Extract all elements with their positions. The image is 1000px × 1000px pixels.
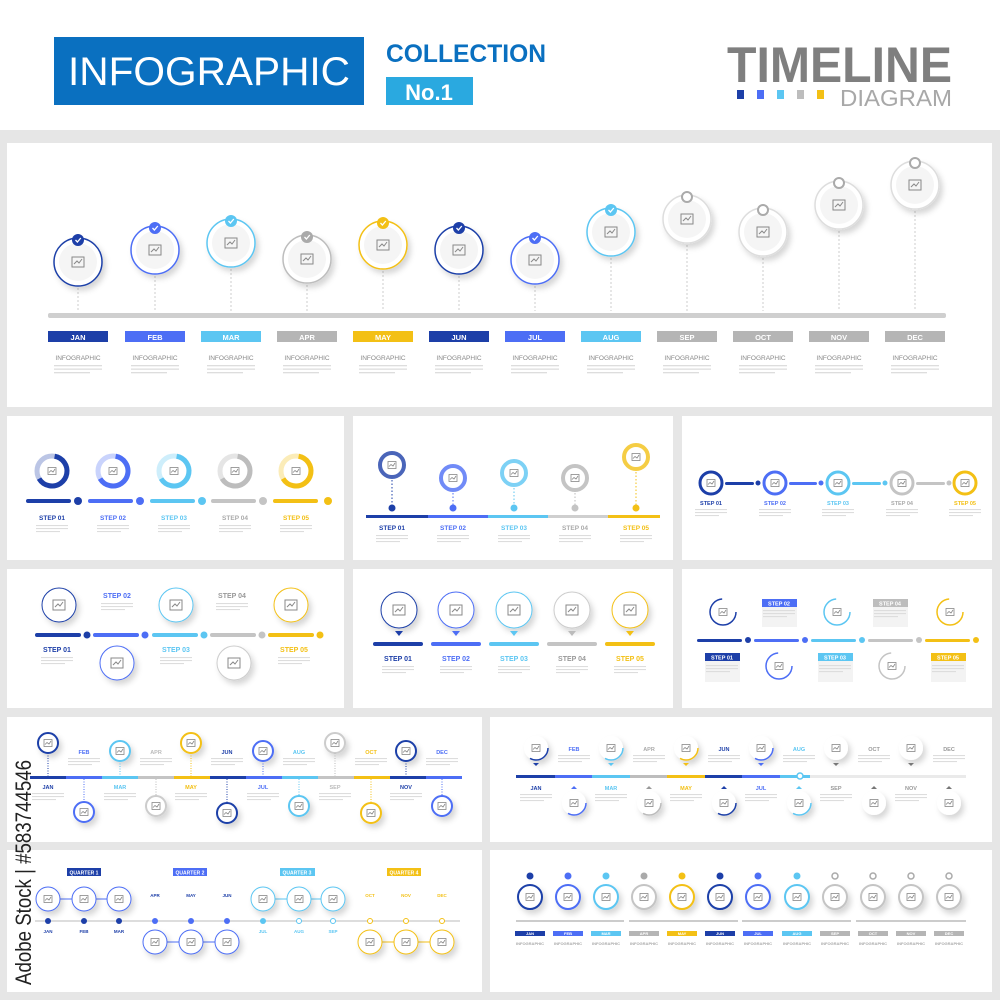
quarter 2: APR bbox=[150, 893, 160, 898]
item MAR: MAR bbox=[222, 333, 240, 342]
step 04 bbox=[547, 592, 597, 673]
step 04: STEP 04 bbox=[879, 602, 902, 608]
months: INFOGRAPHIC bbox=[935, 941, 963, 946]
months: OCT bbox=[868, 747, 880, 753]
item SEP: INFOGRAPHIC bbox=[664, 355, 710, 362]
quarter 4: QUARTER 4 bbox=[390, 870, 419, 876]
panel: 5 steps connected rings bbox=[682, 416, 992, 560]
months: FEB bbox=[78, 750, 90, 756]
item OCT: OCT bbox=[755, 333, 771, 342]
months: SEP bbox=[831, 931, 839, 936]
months: APR bbox=[150, 750, 162, 756]
step 03 bbox=[159, 588, 193, 664]
item JUN bbox=[429, 222, 489, 373]
months bbox=[515, 872, 964, 946]
months: DEC bbox=[436, 750, 448, 756]
months: DEC bbox=[943, 747, 955, 753]
item APR: INFOGRAPHIC bbox=[284, 355, 330, 362]
step 03: STEP 03 bbox=[161, 515, 187, 522]
step 05 bbox=[620, 445, 652, 542]
step 02 bbox=[762, 599, 797, 679]
months: INFOGRAPHIC bbox=[859, 941, 887, 946]
step 02 bbox=[759, 472, 824, 516]
months bbox=[520, 736, 965, 815]
months: INFOGRAPHIC bbox=[783, 941, 811, 946]
months: INFOGRAPHIC bbox=[668, 941, 696, 946]
item JAN: INFOGRAPHIC bbox=[55, 355, 101, 362]
header bbox=[54, 37, 952, 111]
step 01 bbox=[26, 454, 82, 532]
panel: 12-month ring row bbox=[490, 850, 992, 992]
months: JUL bbox=[258, 785, 269, 791]
quarter 4: OCT bbox=[365, 893, 375, 898]
quarter 2 bbox=[143, 868, 239, 954]
months: AUG bbox=[293, 750, 305, 756]
step 02: STEP 02 bbox=[442, 656, 470, 663]
quarter 1: QUARTER 1 bbox=[70, 870, 99, 876]
panel: 5 steps pins on bar bbox=[353, 416, 673, 560]
step 02: STEP 02 bbox=[103, 593, 131, 600]
step 01 bbox=[376, 453, 408, 542]
quarter 1 bbox=[36, 868, 131, 934]
step 04: STEP 04 bbox=[222, 515, 248, 522]
item MAR bbox=[201, 215, 261, 373]
item JUL: JUL bbox=[528, 333, 543, 342]
step 03: STEP 03 bbox=[501, 525, 527, 532]
months: INFOGRAPHIC bbox=[516, 941, 544, 946]
months: JAN bbox=[526, 931, 534, 936]
step 05 bbox=[273, 454, 332, 532]
months: MAR bbox=[601, 931, 611, 936]
months: FEB bbox=[564, 931, 572, 936]
item SEP bbox=[657, 192, 717, 373]
item AUG: AUG bbox=[603, 333, 619, 342]
step 01: STEP 01 bbox=[379, 525, 405, 532]
item JUL: INFOGRAPHIC bbox=[512, 355, 558, 362]
step 02: STEP 02 bbox=[440, 525, 466, 532]
color legend squares bbox=[737, 90, 824, 99]
quarter 3: QUARTER 3 bbox=[283, 870, 312, 876]
step 04 bbox=[216, 593, 251, 680]
step 05: STEP 05 bbox=[623, 525, 649, 532]
step 04 bbox=[211, 454, 267, 532]
quarter 3 bbox=[251, 868, 345, 934]
item FEB: FEB bbox=[148, 333, 163, 342]
step 04: STEP 04 bbox=[218, 593, 246, 600]
months: NOV bbox=[905, 786, 917, 792]
item JAN bbox=[48, 234, 108, 373]
months: SEP bbox=[830, 786, 842, 792]
months: MAR bbox=[605, 786, 617, 792]
step 02 bbox=[431, 592, 481, 673]
step 03: STEP 03 bbox=[827, 501, 849, 507]
step 05: STEP 05 bbox=[937, 656, 959, 662]
months: JAN bbox=[42, 785, 54, 791]
step 01: STEP 01 bbox=[700, 501, 722, 507]
step 04: STEP 04 bbox=[558, 656, 586, 663]
step 01 bbox=[373, 592, 423, 673]
step 05 bbox=[949, 472, 981, 516]
title: TIMELINE: TIMELINE bbox=[727, 37, 952, 93]
step 01: STEP 01 bbox=[39, 515, 65, 522]
quarter 2: JUN bbox=[222, 893, 232, 898]
quarter 3: JUL bbox=[259, 929, 267, 934]
title: INFOGRAPHIC box: INFOGRAPHIC bbox=[68, 50, 350, 94]
step 01: STEP 01 bbox=[711, 656, 733, 662]
item APR: APR bbox=[299, 333, 315, 342]
months: INFOGRAPHIC bbox=[744, 941, 772, 946]
months: INFOGRAPHIC bbox=[897, 941, 925, 946]
step 05 bbox=[274, 588, 310, 664]
quarter 3: SEP bbox=[328, 929, 338, 934]
item JUL bbox=[505, 232, 565, 373]
step 02: STEP 02 bbox=[764, 501, 786, 507]
months: INFOGRAPHIC bbox=[554, 941, 582, 946]
months: MAY bbox=[678, 931, 687, 936]
item AUG: INFOGRAPHIC bbox=[588, 355, 634, 362]
item JUN: INFOGRAPHIC bbox=[436, 355, 482, 362]
months: OCT bbox=[365, 750, 377, 756]
step 01: STEP 01 bbox=[43, 647, 71, 654]
panel: boxed steps bbox=[682, 569, 992, 708]
panel: 5 steps donut rings bbox=[7, 416, 344, 560]
step 03 bbox=[818, 599, 853, 682]
months: JUN bbox=[716, 931, 724, 936]
step 02: STEP 02 bbox=[100, 515, 126, 522]
step 02 bbox=[437, 466, 469, 542]
step 02 bbox=[100, 593, 134, 680]
quarter 1: JAN bbox=[43, 929, 53, 934]
quarter 4: DEC bbox=[437, 893, 447, 898]
step 05: STEP 05 bbox=[616, 656, 644, 663]
step 03 bbox=[150, 454, 206, 532]
item DEC: INFOGRAPHIC bbox=[892, 355, 938, 362]
step 02 bbox=[88, 454, 144, 532]
months: MAY bbox=[185, 785, 197, 791]
item MAY bbox=[353, 217, 413, 373]
months: INFOGRAPHIC bbox=[706, 941, 734, 946]
step 04 bbox=[559, 466, 591, 542]
months: JUL bbox=[756, 786, 767, 792]
item NOV bbox=[809, 178, 869, 373]
months: FEB bbox=[568, 747, 580, 753]
months: INFOGRAPHIC bbox=[592, 941, 620, 946]
item APR bbox=[277, 231, 337, 373]
colored line bbox=[30, 776, 462, 779]
panel: 12-month alternating timeline bbox=[7, 717, 482, 842]
item OCT: INFOGRAPHIC bbox=[740, 355, 786, 362]
months: JUL bbox=[754, 931, 762, 936]
step 01 bbox=[41, 588, 76, 664]
item FEB: INFOGRAPHIC bbox=[132, 355, 178, 362]
badge: No.1 bbox=[386, 77, 473, 105]
months: JUN bbox=[718, 747, 730, 753]
step 03: STEP 03 bbox=[824, 656, 846, 662]
step 03 bbox=[498, 461, 530, 542]
step 03: STEP 03 bbox=[162, 647, 190, 654]
quarter 4: NOV bbox=[401, 893, 411, 898]
panel: zigzag steps bbox=[7, 569, 344, 708]
step 01: STEP 01 bbox=[384, 656, 412, 663]
title: INFOGRAPHIC box bbox=[54, 37, 364, 105]
panel: pointer circles steps bbox=[353, 569, 673, 708]
months: AUG bbox=[793, 747, 805, 753]
months: INFOGRAPHIC bbox=[630, 941, 658, 946]
step 04 bbox=[873, 599, 908, 679]
panel: 12-month progress timeline bbox=[490, 717, 992, 842]
progress line bbox=[516, 773, 966, 779]
subtitle: collection: COLLECTION bbox=[386, 40, 546, 68]
months: APR bbox=[643, 747, 655, 753]
quarter 1: FEB bbox=[80, 929, 89, 934]
item FEB bbox=[125, 222, 185, 373]
months: MAY bbox=[680, 786, 692, 792]
subtitle: DIAGRAM: DIAGRAM bbox=[840, 85, 952, 111]
item DEC bbox=[885, 158, 945, 373]
months: NOV bbox=[907, 931, 916, 936]
item MAY: INFOGRAPHIC bbox=[360, 355, 406, 362]
watermark: vertical stock id text: Adobe Stock | #583744546 bbox=[11, 760, 36, 985]
months: SEP bbox=[329, 785, 341, 791]
quarter 2: QUARTER 2 bbox=[176, 870, 205, 876]
step 03 bbox=[822, 472, 888, 516]
step 05: STEP 05 bbox=[280, 647, 308, 654]
item DEC: DEC bbox=[907, 333, 923, 342]
step 03 bbox=[489, 592, 539, 673]
item NOV: INFOGRAPHIC bbox=[816, 355, 862, 362]
months: OCT bbox=[869, 931, 878, 936]
quarter 4 bbox=[358, 868, 454, 954]
months: JUN bbox=[221, 750, 233, 756]
months: APR bbox=[640, 931, 648, 936]
item AUG bbox=[581, 204, 641, 373]
quarter 1: MAR bbox=[114, 929, 125, 934]
months bbox=[32, 733, 458, 823]
item MAR: INFOGRAPHIC bbox=[208, 355, 254, 362]
badge: No.1: No.1 bbox=[405, 80, 453, 105]
item OCT bbox=[733, 205, 793, 373]
item JAN: JAN bbox=[70, 333, 86, 342]
item NOV: NOV bbox=[831, 333, 847, 342]
months: INFOGRAPHIC bbox=[821, 941, 849, 946]
step 03: STEP 03 bbox=[500, 656, 528, 663]
step 05 bbox=[931, 599, 966, 682]
months: AUG bbox=[793, 931, 801, 936]
months: DEC bbox=[945, 931, 953, 936]
months: JAN bbox=[530, 786, 542, 792]
months: MAR bbox=[114, 785, 126, 791]
step 02: STEP 02 bbox=[768, 602, 790, 608]
step 04 bbox=[886, 472, 952, 516]
item SEP: SEP bbox=[679, 333, 695, 342]
panel: 12-month staggered timeline bbox=[7, 143, 992, 407]
step 01 bbox=[695, 472, 760, 516]
quarter 2: MAY bbox=[186, 893, 196, 898]
step 05: STEP 05 bbox=[954, 501, 976, 507]
step 05 bbox=[605, 592, 655, 673]
step 05: STEP 05 bbox=[283, 515, 309, 522]
item MAY: MAY bbox=[375, 333, 391, 342]
step 04: STEP 04 bbox=[891, 501, 914, 507]
item JUN: JUN bbox=[451, 333, 467, 342]
quarter 3: AUG bbox=[294, 929, 304, 934]
step 04: STEP 04 bbox=[562, 525, 588, 532]
panel: quarterly timeline bbox=[7, 850, 482, 992]
step 01 bbox=[705, 599, 740, 682]
months: NOV bbox=[400, 785, 412, 791]
